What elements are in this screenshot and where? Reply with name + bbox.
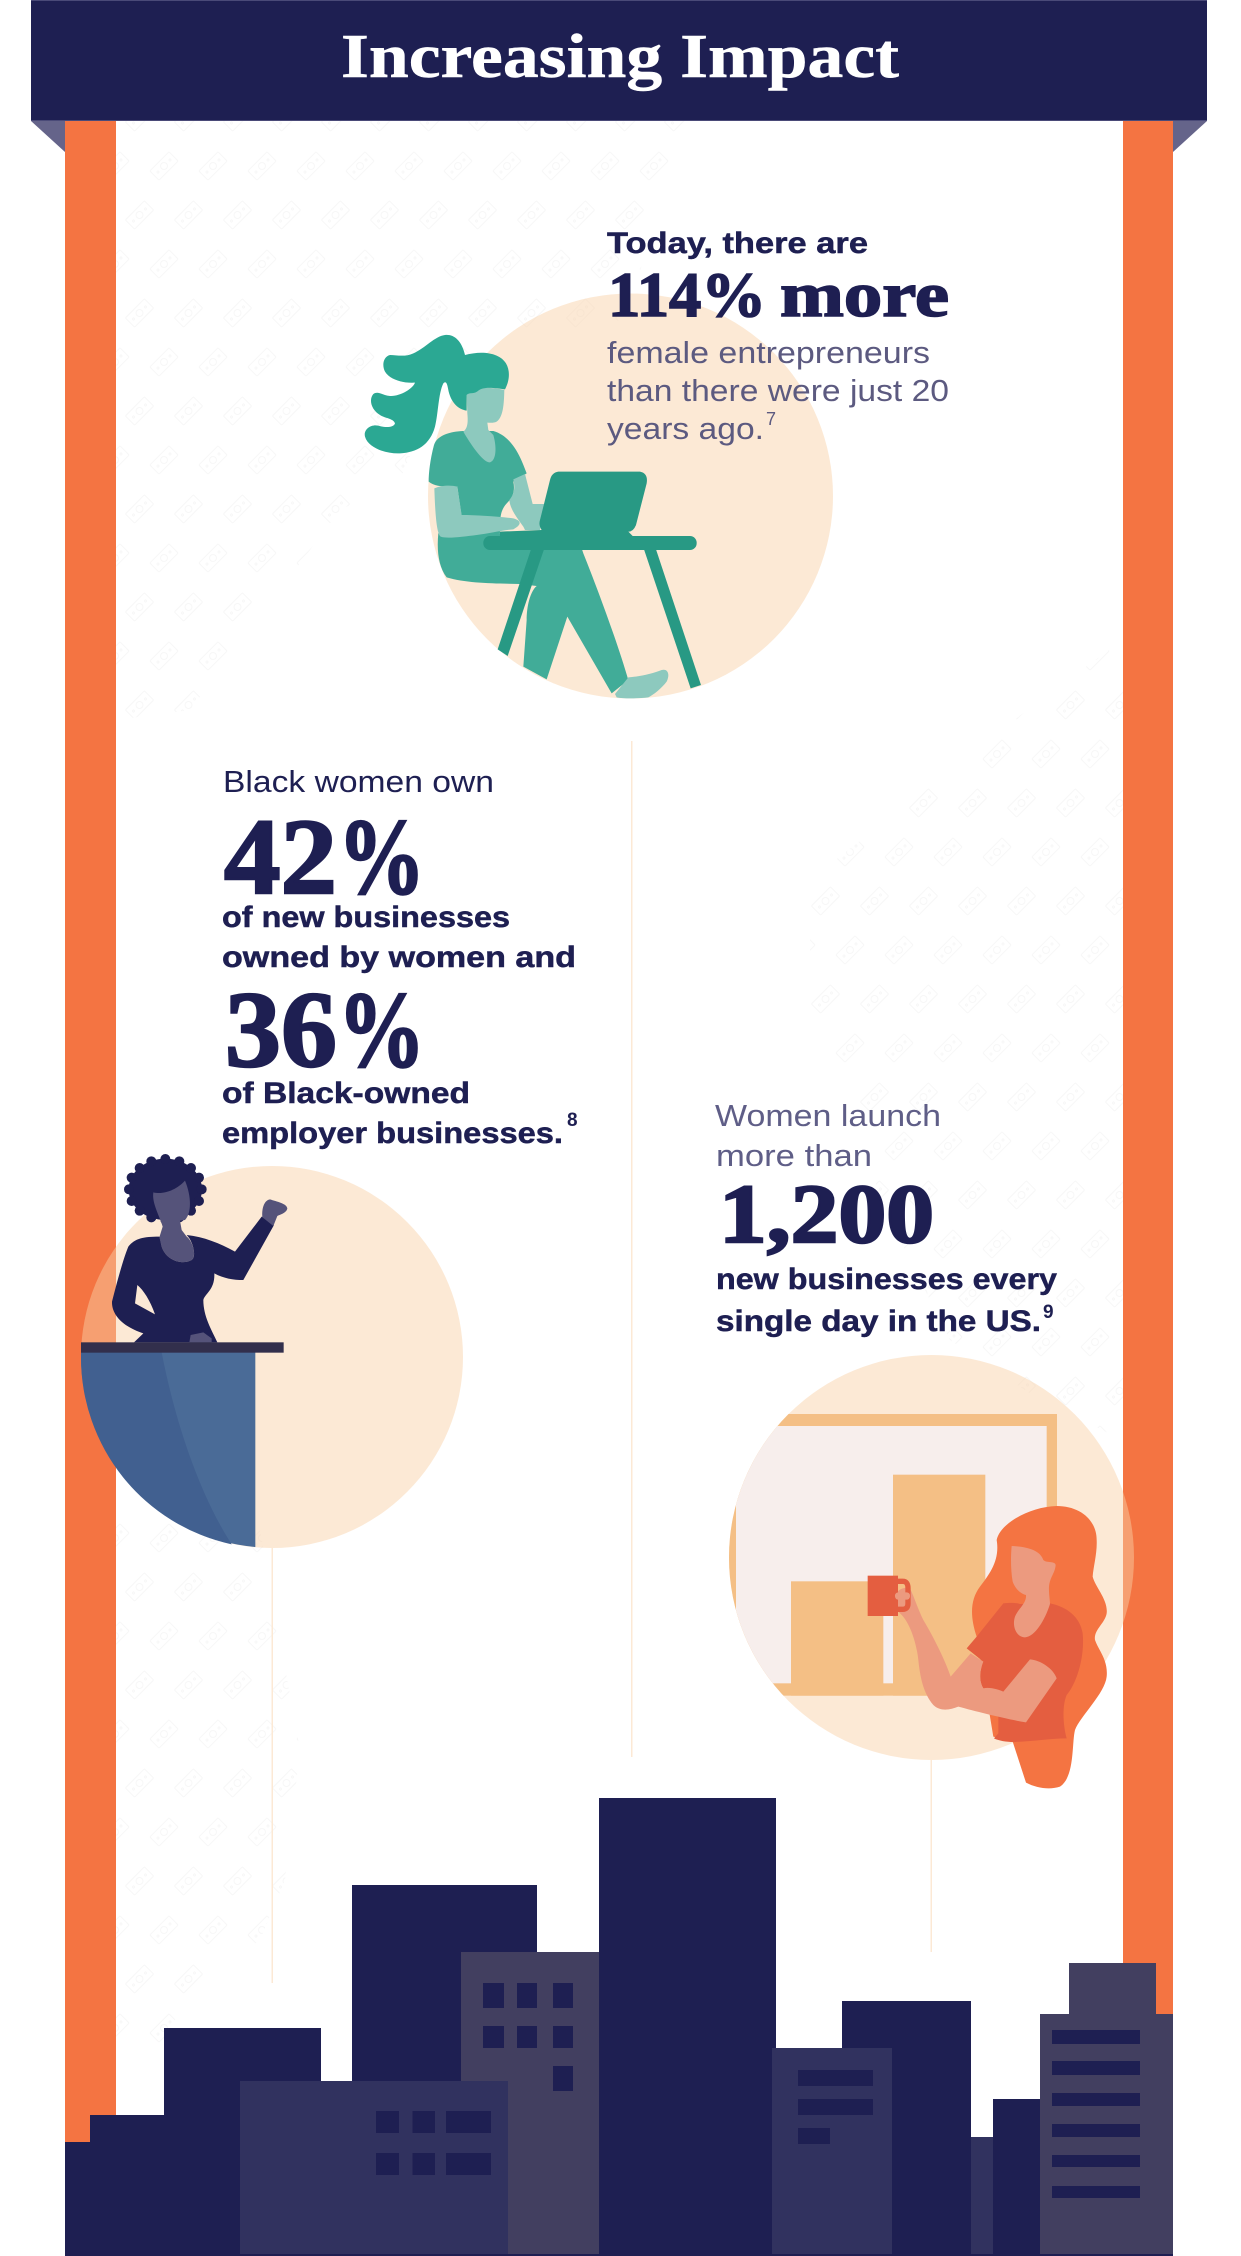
navy buildings (65, 1885, 1040, 2256)
tallest building (599, 1798, 776, 2256)
illustration: woman with mug at window (710, 1414, 1107, 1788)
text: black women stats (222, 764, 578, 1150)
text: women launch stats: new businesses every (716, 1263, 1057, 1296)
text: today there are: than there were just 20 (607, 373, 949, 408)
text: today there are: 114% (608, 259, 766, 330)
text: today there are: more (780, 259, 949, 330)
right mid building (772, 2048, 892, 2256)
circle backdrop (81, 1166, 463, 1548)
text: black women stats: Black women own (223, 764, 494, 799)
text: today there are: years ago. (607, 411, 764, 446)
circle backdrop (428, 294, 833, 698)
text: women launch stats: more than (716, 1138, 872, 1173)
grey building (461, 1952, 599, 2256)
text: today there are: Today, there are (607, 227, 868, 260)
panel: women launch (710, 1098, 1134, 1788)
front building (240, 2081, 508, 2256)
title: Increasing Impact (341, 23, 899, 91)
windows (65, 1983, 1173, 2256)
text: today there are: female entrepreneurs (607, 335, 930, 370)
text: black women stats: employer businesses. (222, 1117, 563, 1150)
text: black women stats: owned by women and (222, 941, 576, 974)
text: women launch stats (715, 1098, 1057, 1338)
text: black women stats: % (338, 798, 425, 917)
panel: black women own (81, 764, 578, 1548)
text: black women stats: of Black-owned (222, 1077, 470, 1110)
illustration: woman at lectern (81, 1154, 287, 1547)
text: today there are (607, 227, 949, 446)
text: women launch stats: 1,200 (719, 1168, 934, 1261)
text: women launch stats: Women launch (715, 1098, 941, 1133)
circle backdrop (729, 1355, 1134, 1760)
panel: today 114% more (365, 227, 949, 698)
text: black women stats: 42 (224, 798, 337, 917)
illustration: woman at laptop (365, 335, 701, 698)
text: black women stats: % (338, 971, 425, 1090)
text: black women stats: 36 (225, 971, 337, 1090)
text: women launch stats: 9 (1043, 1302, 1054, 1323)
illustration: city skyline (65, 1798, 1173, 2256)
vertical connector lines (272, 741, 932, 1983)
right grey tower (1040, 1963, 1173, 2256)
orange right column (1123, 121, 1173, 2181)
text: black women stats: 8 (567, 1110, 578, 1131)
text: women launch stats: single day in the US. (716, 1305, 1041, 1338)
text: black women stats: of new businesses (222, 901, 510, 934)
header banner (31, 0, 1207, 152)
text: today there are: 7 (766, 409, 776, 429)
small low building (971, 2137, 993, 2256)
orange left column (65, 121, 116, 2181)
